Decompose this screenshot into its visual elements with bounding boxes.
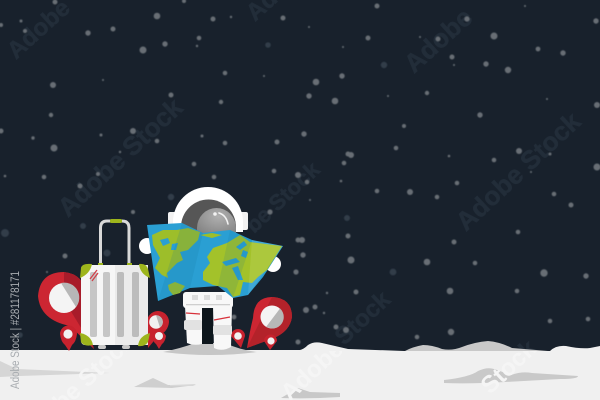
watermarks on the sky: Stock xyxy=(330,286,396,350)
icon: small red pin left xyxy=(60,326,77,351)
grey distant ridge xyxy=(405,341,548,355)
ground shadow patches xyxy=(0,361,110,377)
ocean details xyxy=(160,238,170,246)
white lunar surface xyxy=(0,342,600,400)
astronaut xyxy=(139,187,283,355)
map sheet xyxy=(147,223,283,301)
ground watermarks xyxy=(80,369,512,398)
wheels xyxy=(98,345,106,349)
icon: small red pins beside suitcase xyxy=(147,311,169,349)
torso xyxy=(183,292,233,308)
ground watermarks: Stock xyxy=(476,335,542,399)
moon ground xyxy=(0,341,600,400)
helmet xyxy=(168,187,248,236)
watermarks on the sky: Adobe Stock xyxy=(450,106,587,236)
continents xyxy=(152,228,200,278)
legs xyxy=(184,306,232,350)
icon: large red pin left xyxy=(38,272,94,349)
corner guards xyxy=(80,264,92,278)
grooves xyxy=(90,272,97,337)
watermarks on the sky: be Stock xyxy=(240,156,325,238)
handle xyxy=(100,221,129,266)
map fold shading xyxy=(158,223,203,301)
icon: large red pin right xyxy=(247,297,292,348)
luggage tag xyxy=(90,270,98,281)
icon: small red pins right xyxy=(231,329,277,350)
vertical stock id: Adobe Stock | #281178171 xyxy=(10,271,22,389)
watermarks on the sky: Stock xyxy=(476,335,542,399)
suitcase xyxy=(80,219,150,349)
dim stars xyxy=(1,42,396,338)
foot shadow xyxy=(163,343,257,355)
case body xyxy=(81,265,148,345)
watermarks on the sky: Adobe Stock xyxy=(52,92,189,222)
watermarks on the sky: Adobe xyxy=(398,2,478,78)
world map xyxy=(147,223,283,301)
gloves xyxy=(139,238,155,254)
